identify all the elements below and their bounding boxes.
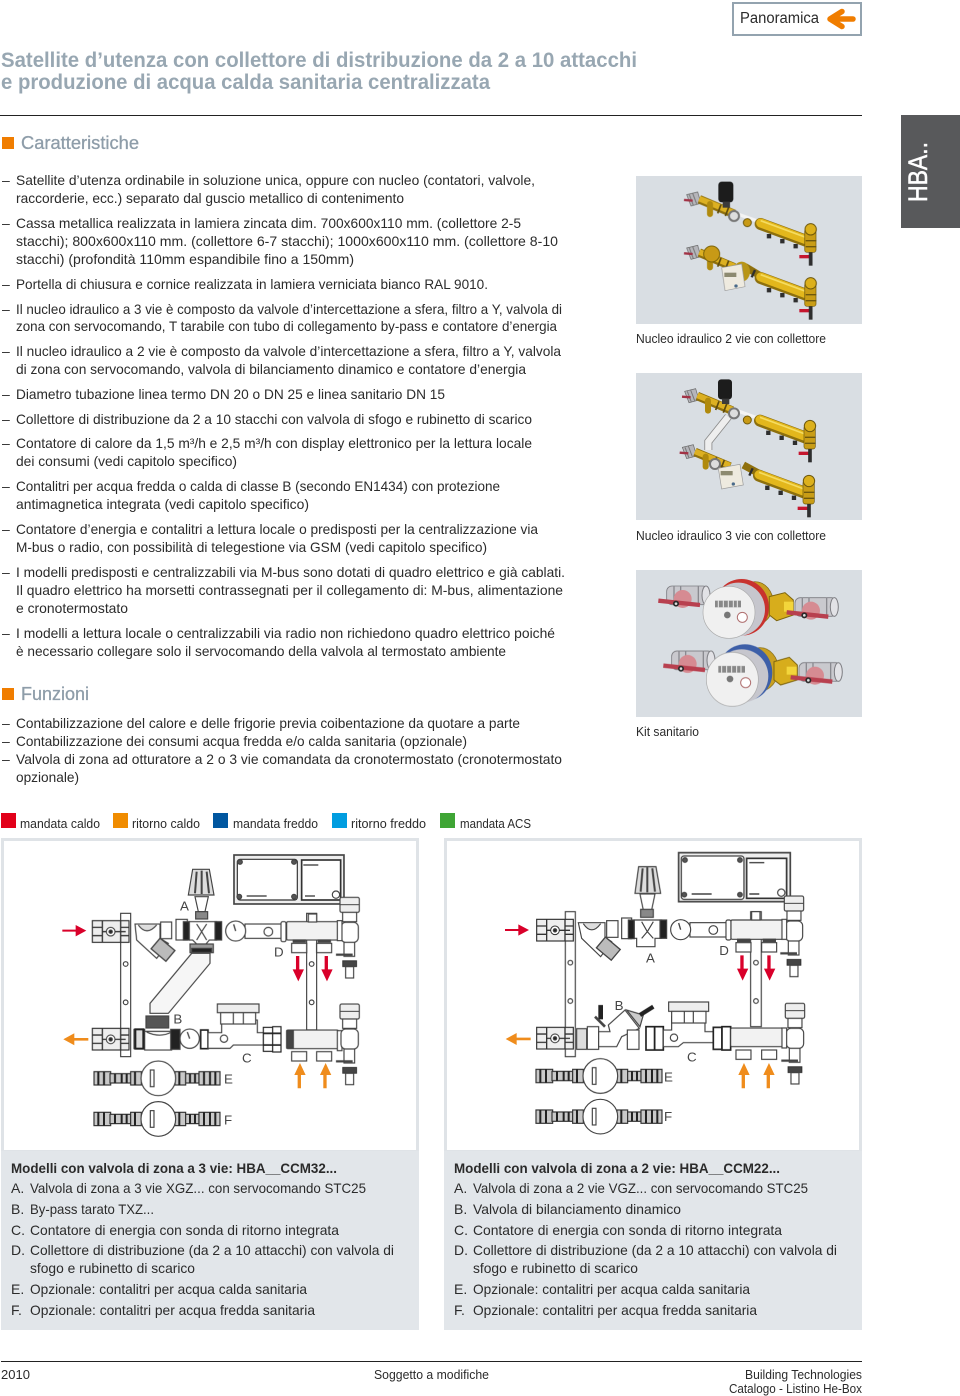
diagram panel: 3 vie: B	[173, 1011, 182, 1026]
panel: modelli 2 vie: sfogo e rubinetto di scarico	[473, 1260, 638, 1276]
text block: caratteristiche list: stacchi) (profondità 110mm espandibile fino a 150mm)	[16, 251, 354, 267]
title: Satellite d’utenza con collettore di distribuzione da 2 a 10 attacchi	[1, 49, 637, 72]
title	[1, 49, 637, 94]
panel: modelli 3 vie: C.	[11, 1222, 25, 1238]
panel: modelli 2 vie: Modelli con valvola di zona a 2 vie: HBA__CCM22...	[454, 1160, 780, 1176]
panel: modelli 2 vie: E.	[454, 1281, 467, 1297]
panel: modelli 2 vie: Opzionale: contalitri per acqua calda sanitaria	[473, 1281, 750, 1297]
footer: Catalogo - Listino He-Box	[729, 1382, 863, 1396]
panel: modelli 3 vie	[1, 1151, 419, 1330]
header tab: Panoramica	[733, 3, 861, 35]
title: e produzione di acqua calda sanitaria centralizzata	[1, 71, 490, 94]
text block: caratteristiche list: –	[2, 386, 10, 402]
panel: modelli 2 vie: Valvola di zona a 2 vie VGZ... con servocomando STC25	[473, 1180, 808, 1196]
text block: caratteristiche list: Il nucleo idraulico a 3 vie è composto da valvole d’intercettazione a sfera, filtro a Y, valvola di	[16, 301, 562, 317]
diagram panel: 2 vie: B	[615, 998, 624, 1013]
panel: modelli 2 vie	[444, 1151, 862, 1330]
text block: caratteristiche list: –	[2, 276, 10, 292]
text block: funzioni list: –	[2, 751, 10, 767]
panel: modelli 2 vie: A.	[454, 1180, 467, 1196]
header tab: Panoramica: Panoramica	[740, 10, 819, 27]
panel: modelli 2 vie: Opzionale: contalitri per acqua fredda sanitaria	[473, 1302, 757, 1318]
panel: modelli 2 vie: F.	[454, 1302, 465, 1318]
diagram panel: 2 vie: C	[687, 1050, 697, 1065]
text block: funzioni list: Valvola di zona ad otturatore a 2 o 3 vie comandata da cronotermostato (cronotermostato	[16, 751, 562, 767]
text block: caratteristiche list: Il quadro elettrico ha morsetti contrassegnati per il collegamento di: M-bus, alimentazione	[16, 582, 563, 598]
panel: modelli 3 vie: Valvola di zona a 3 vie XGZ... con servocomando STC25	[30, 1180, 366, 1196]
text block: caratteristiche list: –	[2, 625, 10, 641]
text block: caratteristiche list: –	[2, 301, 10, 317]
legend: mandata ACS	[460, 816, 531, 831]
panel: modelli 2 vie: Contatore di energia con sonda di ritorno integrata	[473, 1222, 782, 1238]
text block: caratteristiche list: antimagnetica integrata (vedi capitolo specifico)	[16, 496, 309, 512]
panel: modelli 3 vie: Collettore di distribuzione (da 2 a 10 attacchi) con valvola di	[30, 1242, 394, 1258]
text block: caratteristiche list: di zona con servocomando, valvola di bilanciamento dinamico e contatore d’energia	[16, 361, 526, 377]
footer: Soggetto a modifiche	[374, 1368, 489, 1382]
text block: caratteristiche list: Contatore d’energia e contalitri a lettura locale o predisposti per la centralizzazione via	[16, 521, 538, 537]
text block: funzioni list: Contabilizzazione del calore e delle frigorie previa coibentazione da quotare a parte	[16, 715, 520, 731]
caption: Kit sanitario	[636, 725, 699, 739]
text block: caratteristiche list: Collettore di distribuzione da 2 a 10 stacchi con valvola di sfogo e rubinetto di scarico	[16, 411, 532, 427]
caption: Nucleo idraulico 2 vie con collettore	[636, 332, 826, 346]
footer: 2010	[1, 1368, 30, 1382]
panel: modelli 3 vie: Modelli con valvola di zona a 3 vie: HBA__CCM32...	[11, 1160, 337, 1176]
heading: Funzioni: Funzioni	[21, 684, 89, 704]
heading: Caratteristiche: Caratteristiche	[21, 133, 139, 153]
text block: caratteristiche list: Satellite d’utenza ordinabile in soluzione unica, oppure con nucleo (contatori, valvole,	[16, 172, 535, 188]
text block: funzioni list	[2, 715, 562, 785]
side tab: HBA	[901, 115, 960, 228]
text block: funzioni list: –	[2, 715, 10, 731]
text block: caratteristiche list: zona con servocomando, T tarabile con tubo di collegamento by-pass e contatore d’energia	[16, 318, 557, 334]
text block: caratteristiche list: –	[2, 564, 10, 580]
panel: modelli 2 vie: Collettore di distribuzione (da 2 a 10 attacchi) con valvola di	[473, 1242, 837, 1258]
panel: modelli 3 vie: E.	[11, 1281, 24, 1297]
text block: caratteristiche list	[2, 172, 565, 659]
text block: caratteristiche list: M-bus o radio, con possibilità di telegestione via GSM (vedi capitolo specifico)	[16, 539, 487, 555]
panel: modelli 2 vie: D.	[454, 1242, 468, 1258]
text block: caratteristiche list: –	[2, 215, 10, 231]
text block: caratteristiche list: –	[2, 435, 10, 451]
text block: caratteristiche list: I modelli a lettura locale o centralizzabili via radio non richiedono quadro elettrico poiché	[16, 625, 555, 641]
text block: caratteristiche list: stacchi); 800x600x110 mm. (collettore 6-7 stacchi); 1000x600x110 mm. (collettore 8-10	[16, 233, 558, 249]
legend: ritorno freddo	[351, 816, 426, 831]
photo: nucleo idraulico 2 vie	[636, 176, 862, 324]
panel: modelli 3 vie: sfogo e rubinetto di scarico	[30, 1260, 195, 1276]
diagram panel: 3 vie	[2, 840, 418, 1152]
panel: modelli 3 vie: A.	[11, 1180, 24, 1196]
text block: caratteristiche list: –	[2, 343, 10, 359]
legend: mandata caldo	[20, 816, 100, 831]
text block: caratteristiche list: –	[2, 172, 10, 188]
text block: caratteristiche list: –	[2, 521, 10, 537]
caption: Nucleo idraulico 3 vie con collettore	[636, 529, 826, 543]
panel: modelli 2 vie: B.	[454, 1201, 467, 1217]
panel: modelli 3 vie: Opzionale: contalitri per acqua fredda sanitaria	[30, 1302, 315, 1318]
legend: ritorno caldo	[132, 816, 200, 831]
text block: caratteristiche list: Diametro tubazione linea termo DN 20 o DN 25 e linea sanitario DN 15	[16, 386, 445, 402]
diagram panel: 2 vie: E	[664, 1069, 673, 1084]
text block: caratteristiche list: Portella di chiusura e cornice realizzata in lamiera verniciata bianco RAL 9010.	[16, 276, 488, 292]
footer	[1, 1361, 863, 1396]
text block: caratteristiche list: raccorderie, ecc.) separato dal guscio metallico di contenimento	[16, 190, 404, 206]
footer: Building Technologies	[745, 1368, 862, 1382]
text block: caratteristiche list: è necessario collegare solo il servocomando della valvola al termostato ambiente	[16, 643, 506, 659]
text block: caratteristiche list: Contatore di calore da 1,5 m³/h e 2,5 m³/h con display elettronico per la lettura locale	[16, 435, 532, 451]
text block: caratteristiche list: –	[2, 411, 10, 427]
text block: caratteristiche list: –	[2, 478, 10, 494]
diagram panel: 2 vie: D	[719, 943, 729, 958]
side tab: HBA: HBA..	[903, 142, 933, 202]
photo: kit sanitario	[636, 570, 862, 717]
panel: modelli 3 vie: By-pass tarato TXZ...	[30, 1201, 154, 1217]
panel: modelli 3 vie: Contatore di energia con sonda di ritorno integrata	[30, 1222, 339, 1238]
panel: modelli 2 vie: C.	[454, 1222, 468, 1238]
panel: modelli 2 vie: Valvola di bilanciamento dinamico	[473, 1201, 681, 1217]
diagram panel: 3 vie: E	[224, 1072, 233, 1087]
text block: caratteristiche list: Cassa metallica realizzata in lamiera zincata dim. 700x600x110 mm. (collettore 2-5	[16, 215, 521, 231]
text block: caratteristiche list: I modelli predisposti e centralizzabili via M-bus sono dotati di quadro elettrico e già cablati.	[16, 564, 565, 580]
panel: modelli 3 vie: B.	[11, 1201, 24, 1217]
text block: caratteristiche list: dei consumi (vedi capitolo specifico)	[16, 453, 237, 469]
diagram panel: 3 vie: C	[242, 1051, 252, 1066]
text block: funzioni list: –	[2, 733, 10, 749]
text block: caratteristiche list: Il nucleo idraulico a 2 vie è composto da valvole d’intercettazione a sfera, filtro a Y, valvola	[16, 343, 561, 359]
panel: modelli 3 vie: D.	[11, 1242, 25, 1258]
diagram panel: 2 vie: F	[664, 1109, 672, 1124]
diagram panel: 2 vie	[446, 840, 860, 1152]
diagram panel: 3 vie: F	[224, 1112, 232, 1127]
text block: funzioni list: Contabilizzazione dei consumi acqua fredda e/o calda sanitaria (opzionale)	[16, 733, 467, 749]
diagram panel: 2 vie: A	[646, 951, 655, 966]
panel: modelli 3 vie: F.	[11, 1302, 22, 1318]
legend: mandata freddo	[233, 816, 318, 831]
diagram panel: 3 vie: A	[180, 899, 189, 914]
text block: funzioni list: opzionale)	[16, 769, 79, 785]
text block: caratteristiche list: Contalitri per acqua fredda o calda di classe B (secondo EN1434) con protezione	[16, 478, 500, 494]
legend	[1, 813, 531, 831]
photo: nucleo idraulico 3 vie	[636, 373, 862, 520]
diagram panel: 3 vie: D	[274, 945, 284, 960]
panel: modelli 3 vie: Opzionale: contalitri per acqua calda sanitaria	[30, 1281, 307, 1297]
text block: caratteristiche list: e cronotermostato	[16, 600, 128, 616]
